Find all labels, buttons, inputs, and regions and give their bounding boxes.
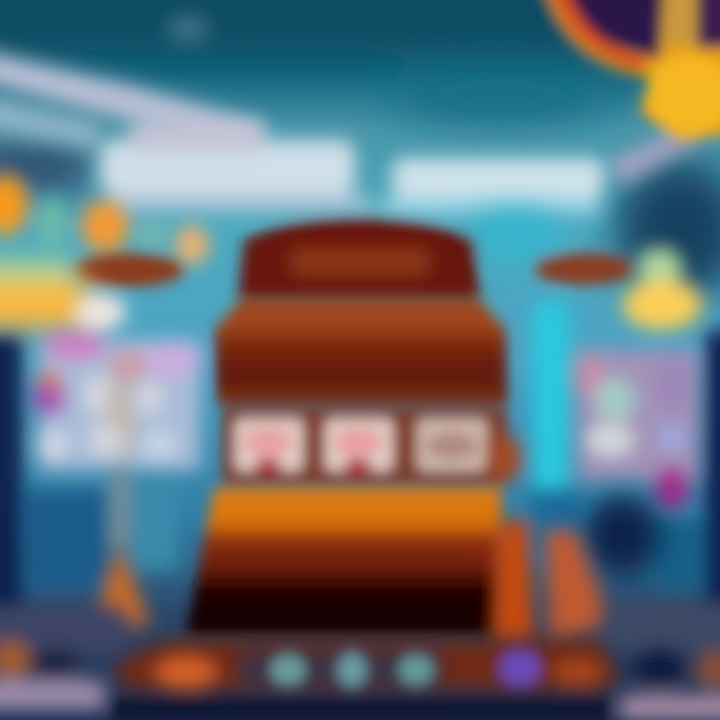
floor	[0, 601, 720, 720]
dark button panel	[240, 650, 440, 690]
machine base	[110, 640, 620, 720]
left post	[110, 470, 130, 550]
left colored lamps	[0, 175, 209, 265]
light streak across ceiling	[0, 48, 700, 185]
right slot machines bank	[574, 350, 700, 509]
machine upper body	[214, 300, 508, 405]
reel panel	[222, 408, 507, 484]
base platform	[110, 640, 620, 690]
base dark underside	[110, 698, 610, 720]
left dark pillar	[0, 335, 178, 615]
blurred title banner	[100, 122, 604, 216]
right dark pillar and shadows	[530, 330, 720, 620]
ceiling: dark teal shading	[0, 0, 720, 300]
base purple button	[498, 649, 542, 687]
base button 3	[398, 654, 434, 686]
machine top arch	[238, 218, 480, 298]
left lamp shade	[72, 253, 184, 287]
left orange leg	[92, 545, 150, 630]
slot machine	[186, 218, 522, 634]
reel 1	[234, 418, 304, 474]
right orange legs	[492, 520, 612, 640]
base button 2	[337, 652, 367, 688]
cyan glow beside machine top	[465, 207, 565, 263]
right cyan column	[532, 300, 570, 500]
crown decoration top right	[540, 0, 720, 142]
side lever knob	[490, 434, 522, 482]
reel 3	[416, 418, 488, 472]
machine lower cabinet	[186, 488, 502, 634]
reel 2	[324, 418, 394, 474]
right floor shadow	[584, 495, 660, 575]
left rainbow glow	[0, 260, 95, 329]
orange base glow right	[552, 658, 604, 686]
base button 1	[270, 654, 306, 686]
orange base glow left	[154, 656, 218, 688]
top arch nameplate	[290, 248, 430, 276]
ceiling star glow	[166, 15, 210, 43]
right lamp glow	[622, 248, 702, 330]
right lamp shade	[534, 253, 634, 285]
left slot machines bank	[34, 294, 202, 470]
